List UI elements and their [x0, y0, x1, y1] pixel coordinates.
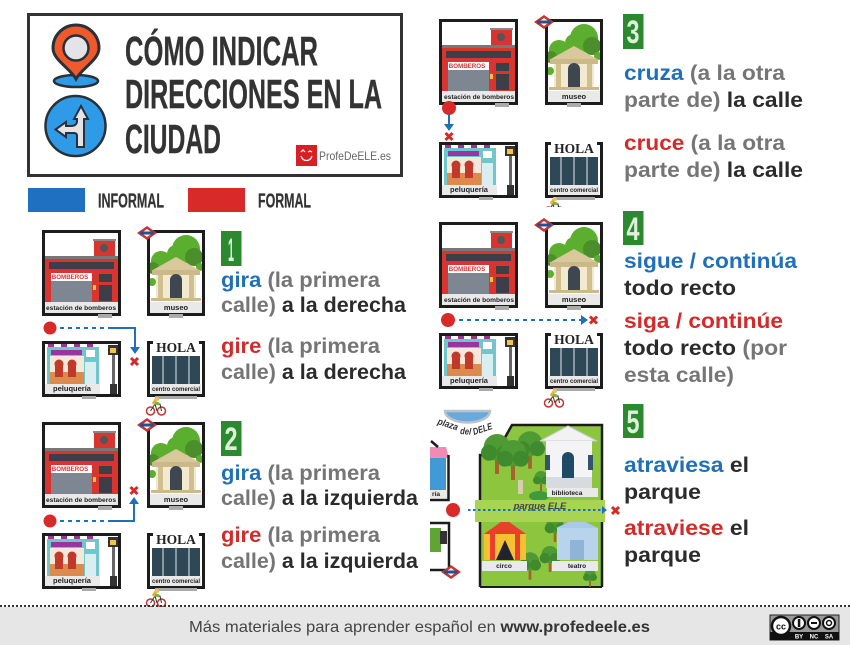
- teatro: teatro: [568, 563, 586, 570]
- map: scene 5, park: [430, 411, 619, 587]
- text block: step 2: gira (la primera: [221, 462, 380, 485]
- plaza del DELE: DELE: [472, 421, 494, 438]
- text block: step 1: calle) a la derecha: [221, 294, 406, 317]
- heading: CIUDAD: [125, 116, 221, 162]
- neighbouring shops: ría: [432, 491, 440, 498]
- map: scene 1: peluquería: [53, 384, 92, 393]
- park trees: [481, 431, 597, 587]
- map: scene 1: [44, 226, 204, 415]
- text block: step 4: esta calle): [624, 364, 734, 387]
- teatro: [552, 518, 598, 571]
- text block: step 2: calle) a la izquierda: [221, 487, 418, 510]
- icon: CC BY-NC-SA badge: NC: [810, 634, 819, 640]
- footer: Más materiales para aprender español en www.profedeele.es: [189, 619, 650, 636]
- map: scene 4: peluquería: [450, 376, 489, 385]
- biblioteca: biblioteca: [552, 490, 583, 497]
- text block: step 5: [623, 404, 749, 567]
- logo: ProfeDeELE.es: [296, 145, 391, 166]
- map: scene 1: estación de bomberos: [46, 305, 116, 312]
- map: scene 1: centro comercial: [152, 387, 200, 393]
- map: scene 4: BOMBEROS: [449, 266, 485, 273]
- map: scene 3: BOMBEROS: [449, 63, 485, 70]
- plaza del DELE: [435, 411, 494, 438]
- text block: step 3: parte de) la calle: [624, 89, 803, 112]
- text block: step 3: parte de) la calle: [624, 159, 803, 182]
- icon: CC BY-NC-SA badge: [770, 615, 839, 640]
- map: scene 2: BOMBEROS: [52, 466, 88, 473]
- heading: [125, 28, 382, 162]
- map: scene 1: HOLA: [156, 340, 196, 355]
- plaza del DELE: plaza: [435, 416, 459, 433]
- map: scene 4: museo: [562, 295, 586, 304]
- text block: step 4: siga / continúe: [624, 310, 783, 333]
- map: scene 2: centro comercial: [152, 579, 200, 585]
- text block: step 3: cruce (a la otra: [624, 132, 785, 155]
- band and arrow: across the park: parque ELE: [513, 501, 567, 512]
- map: scene 1: BOMBEROS: [52, 274, 88, 281]
- icon: CC BY-NC-SA badge: SA: [825, 634, 834, 640]
- text block: step 2: 2: [224, 421, 238, 457]
- map: scene 4: [440, 218, 602, 407]
- map: scene 2: HOLA: [156, 532, 196, 547]
- text block: step 5: 5: [626, 404, 640, 440]
- map: scene 2: museo: [164, 495, 188, 504]
- text block: step 5: parque: [624, 481, 701, 504]
- icon: road fork sign: [46, 96, 106, 156]
- text block: step 3: [623, 14, 803, 182]
- heading: DIRECCIONES EN LA: [125, 71, 382, 117]
- icon: CC BY-NC-SA badge: cc: [776, 622, 786, 632]
- heading: CÓMO INDICAR: [125, 28, 318, 74]
- map: scene 2: peluquería: [53, 576, 92, 585]
- map: scene 2: [44, 418, 204, 607]
- text block: step 1: [221, 231, 406, 384]
- logo: ProfeDeELE.es: ProfeDeELE.es: [319, 149, 391, 163]
- icon: CC BY-NC-SA badge: BY: [795, 634, 803, 640]
- legend: INFORMAL: [98, 190, 164, 212]
- map: scene 4: HOLA: [554, 332, 594, 347]
- arrow: turn right: [44, 322, 140, 365]
- text block: step 2: calle) a la izquierda: [221, 550, 418, 573]
- icon: map pin: [53, 25, 99, 87]
- arrow: cross: [442, 101, 456, 140]
- circo: circo: [496, 563, 512, 570]
- text block: step 5: atraviesa el: [624, 454, 749, 477]
- text block: step 1: gire (la primera: [221, 335, 380, 358]
- circo: [482, 519, 527, 571]
- park ground: [480, 425, 602, 587]
- text block: step 4: [623, 211, 797, 387]
- text block: step 4: todo recto (por: [624, 337, 787, 360]
- legend: [28, 188, 311, 212]
- legend: FORMAL: [258, 190, 311, 212]
- biblioteca: [540, 426, 598, 497]
- map: scene 3: museo: [562, 92, 586, 101]
- map: scene 4: estación de bomberos: [444, 297, 514, 304]
- map: scene 4: centro comercial: [550, 379, 598, 385]
- text block: step 5: parque: [624, 544, 701, 567]
- text block: step 5: atraviese el: [624, 517, 749, 540]
- neighbouring shops: [430, 441, 461, 579]
- text block: step 1: calle) a la derecha: [221, 361, 406, 384]
- band and arrow: across the park: [446, 500, 619, 522]
- map: scene 1: museo: [164, 303, 188, 312]
- map: scene 3: peluquería: [450, 185, 489, 194]
- panel: title box: [28, 14, 402, 176]
- text block: step 4: todo recto: [624, 277, 736, 300]
- map: scene 3: [440, 15, 602, 215]
- text block: step 2: gire (la primera: [221, 524, 380, 547]
- text block: step 1: gira (la primera: [221, 269, 380, 292]
- text block: step 3: 3: [626, 14, 640, 50]
- plaza del DELE: del: [460, 426, 472, 438]
- map: scene 2: estación de bomberos: [46, 497, 116, 504]
- map: scene 3: centro comercial: [550, 188, 598, 194]
- text block: step 4: 4: [626, 211, 640, 247]
- map: scene 3: HOLA: [554, 141, 594, 156]
- arrow: turn left: [44, 487, 139, 528]
- text block: step 4: sigue / continúa: [624, 250, 797, 273]
- text block: step 2: [221, 421, 418, 573]
- arrow: straight ahead: [441, 313, 597, 327]
- text block: step 3: cruza (a la otra: [624, 62, 785, 85]
- text block: step 1: 1: [228, 232, 234, 268]
- footer: [0, 606, 850, 645]
- map: scene 3: estación de bomberos: [444, 94, 514, 101]
